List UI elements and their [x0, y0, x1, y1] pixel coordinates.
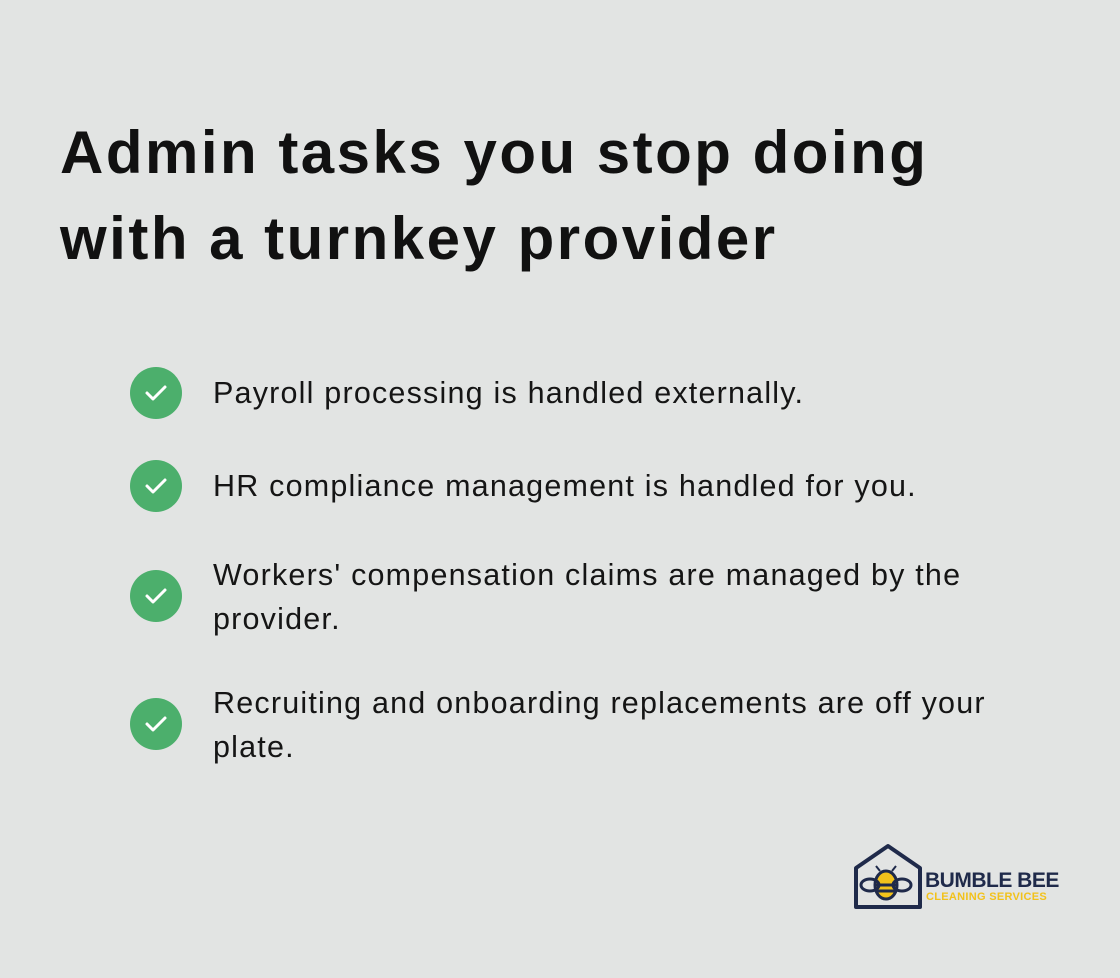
title — [60, 119, 928, 272]
item 3 — [130, 558, 961, 636]
title: Admin tasks you stop doing — [60, 119, 928, 186]
item 2 — [130, 460, 917, 512]
icon: bee house — [854, 844, 922, 909]
item 1 — [130, 367, 804, 419]
logo — [854, 844, 1059, 909]
title: with a turnkey provider — [60, 205, 778, 272]
icon: check — [130, 367, 182, 419]
item 4 — [130, 686, 986, 764]
text: Payroll processing is handled externally. — [213, 376, 804, 410]
icon: check — [130, 698, 182, 750]
icon: check — [130, 460, 182, 512]
logo: CLEANING SERVICES — [926, 891, 1047, 903]
text: HR compliance management is handled for you. — [213, 469, 917, 503]
text: Workers' compensation claims are managed by the provider. — [213, 558, 961, 636]
logo text: BUMBLE BEE — [925, 869, 1059, 892]
icon: check — [130, 570, 182, 622]
text: Recruiting and onboarding replacements are off your plate. — [213, 686, 986, 764]
